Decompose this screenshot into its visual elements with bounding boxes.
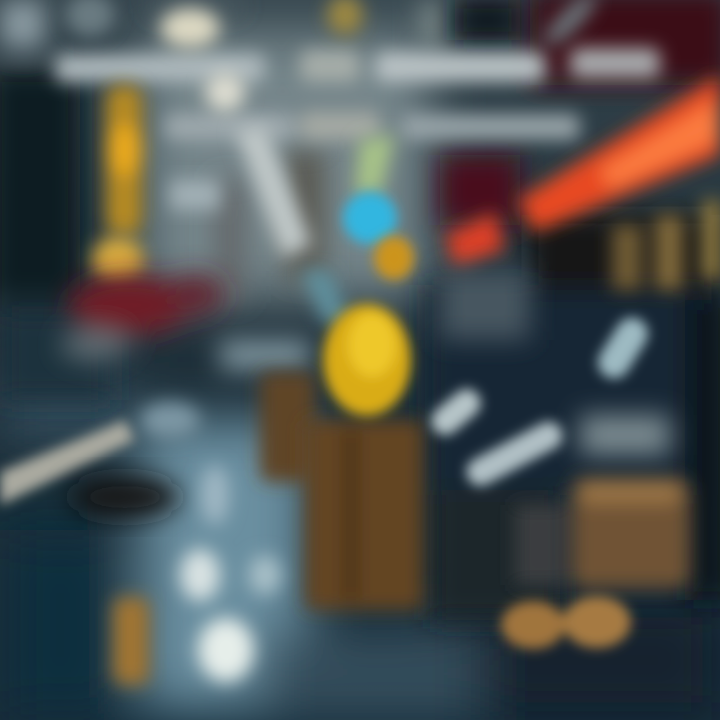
pale panel [170,180,220,210]
red car blob [60,275,223,361]
orange neon band [518,75,720,232]
title blur lines [55,48,660,140]
gold vertical beam [106,85,143,235]
grey reflections [220,270,670,455]
gold orb [92,236,144,284]
brown coin column [305,420,423,610]
pale capsules [426,312,654,491]
teal streak [300,270,350,325]
floor lights [140,402,281,682]
white diagonal bar [0,420,135,505]
upper column shadows [150,0,445,300]
yellow green streak [355,135,395,195]
dark right section [425,0,720,620]
black shadow [70,477,180,517]
cyan orb [343,192,397,244]
dark left column [0,0,520,400]
diagonal light beam [235,125,312,258]
orange orb [374,236,414,280]
coins lower right [501,596,631,649]
gold windows [612,200,720,290]
top ceiling lights [65,0,602,112]
brown stack left [260,372,315,482]
red orange patch [445,212,505,270]
brown boxes right [515,478,690,588]
gold coin [323,304,411,416]
gold floor reflection [113,597,149,685]
